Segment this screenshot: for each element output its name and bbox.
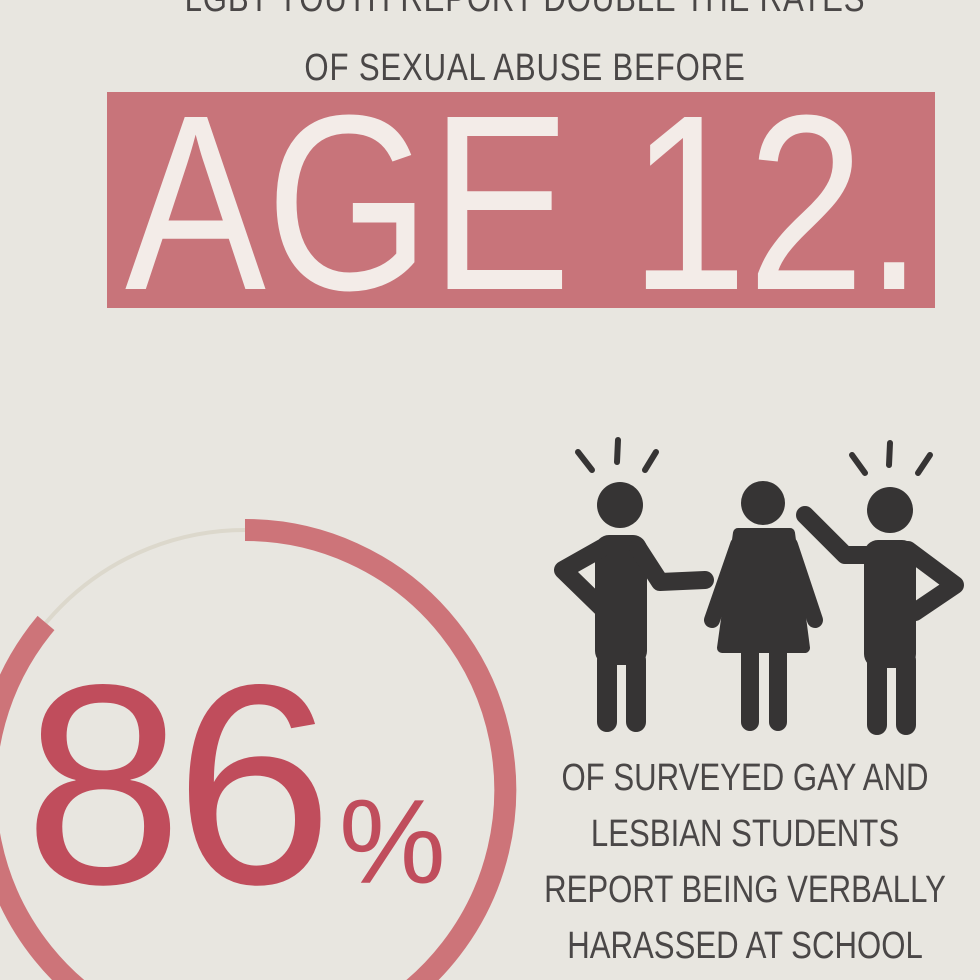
caption text: LESBIAN STUDENTS — [591, 813, 899, 855]
caption text: HARASSED AT SCHOOL — [567, 925, 923, 967]
caption text: OF SURVEYED GAY AND — [561, 757, 929, 799]
banner: AGE 12 — [107, 92, 935, 308]
heading line 2: OF SEXUAL ABUSE BEFORE — [304, 47, 746, 89]
stat: 86%: 86% — [24, 626, 446, 944]
people icon — [563, 440, 955, 725]
caption text: REPORT BEING VERBALLY — [544, 869, 946, 911]
caption text — [544, 757, 946, 967]
